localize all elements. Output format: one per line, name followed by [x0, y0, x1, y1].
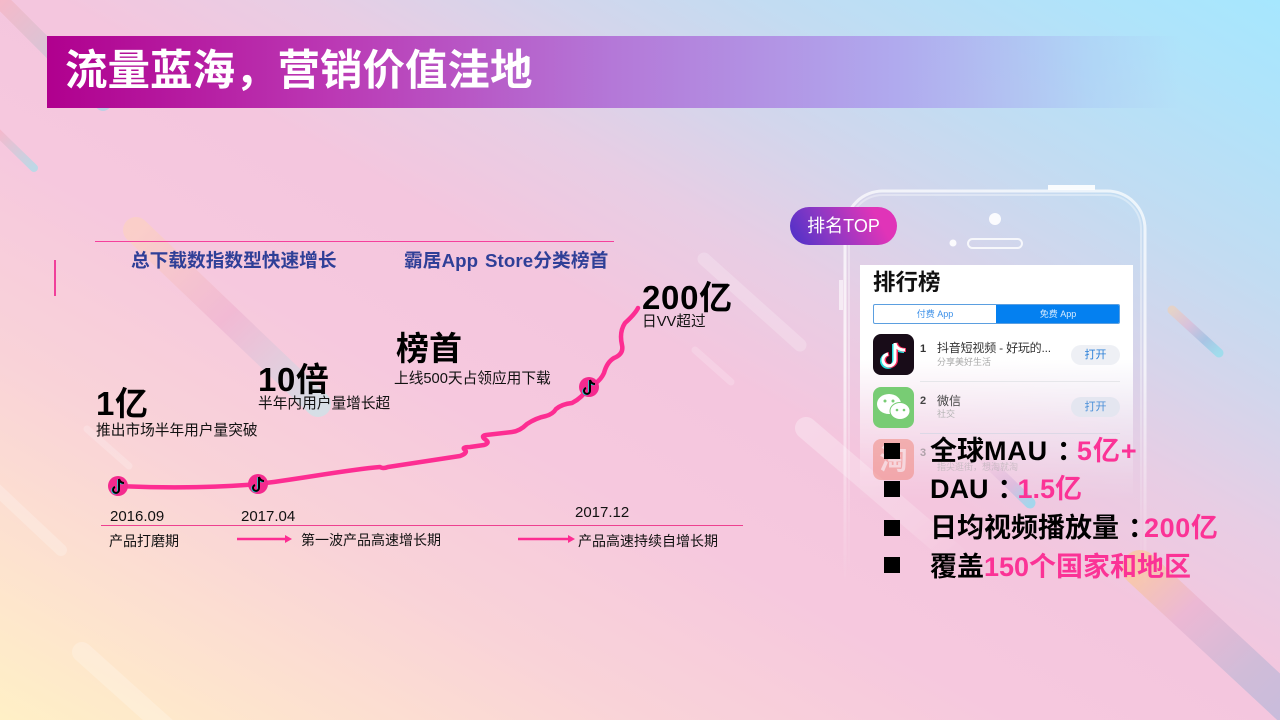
row 2 WeChat: 微信 [937, 394, 961, 408]
title: 流量蓝海，营销价值洼地 [65, 48, 533, 95]
row divider [920, 433, 1120, 434]
row 1 Douyin: 打开 [1084, 349, 1106, 361]
icon: wechat [873, 387, 914, 428]
key metrics list [884, 429, 1218, 582]
row 2 WeChat: 社交 [937, 409, 955, 419]
row 2 WeChat: 2 [920, 395, 926, 407]
screen heading: 排行榜 [873, 270, 941, 295]
segmented tabs: 免费 App [1040, 309, 1076, 319]
milestone 榜首: 上线500天占领应用下载 [394, 371, 551, 387]
row 1 Douyin: 1 [920, 343, 926, 355]
metric: coverage: 覆盖150个国家和地区 [930, 552, 1191, 582]
row 2 WeChat: 打开 [1084, 401, 1106, 413]
phone mockup [839, 185, 1146, 530]
milestone 1亿: 1亿 [96, 385, 149, 422]
side accent [54, 260, 56, 296]
milestone 1亿: 推出市场半年用户量突破 [96, 423, 258, 439]
milestone 200亿: 日VV超过 [642, 314, 706, 330]
title banner [47, 36, 1180, 108]
phase labels: 产品打磨期 [109, 533, 179, 549]
segmented tabs: 付费 App [917, 309, 953, 319]
row 3 Taobao: 指尖逛街，想淘就淘 [937, 462, 1018, 472]
icon: douyin [873, 334, 914, 375]
milestone 榜首 [394, 330, 551, 387]
phase labels: 第一波产品高速增长期 [301, 532, 441, 548]
date labels: 2017.04 [241, 508, 295, 525]
milestone 10倍 [258, 361, 390, 412]
icon: taobao: 淘 [879, 444, 908, 475]
chart: growth timeline [54, 241, 743, 549]
date labels: 2016.09 [110, 508, 164, 525]
milestone 榜首: 榜首 [396, 330, 462, 367]
axis rule [101, 525, 743, 526]
subheading: downloads: 总下载数指数型快速增长 [131, 250, 337, 271]
row 3 Taobao: 3 [920, 447, 926, 459]
row divider [920, 381, 1120, 382]
phase labels: 产品高速持续自增长期 [578, 533, 718, 549]
milestone 200亿: 200亿 [642, 279, 733, 316]
icon: taobao [873, 439, 914, 480]
app ranking screen [860, 265, 1133, 500]
phase labels [109, 532, 718, 549]
badge: ranking top: 排名TOP [807, 216, 880, 236]
segmented tabs [873, 304, 1120, 324]
date labels [110, 504, 629, 525]
growth curve with markers [108, 306, 640, 543]
badge: ranking top [790, 207, 897, 245]
row 1 Douyin: 分享美好生活 [937, 357, 991, 367]
top rule [95, 241, 614, 242]
subheading: app store: 霸居App Store分类榜首 [404, 250, 608, 271]
phone outline [839, 185, 1146, 530]
milestone 10倍: 10倍 [258, 361, 330, 398]
metric: daily views: 日均视频播放量 ：200亿 [930, 506, 1218, 545]
metric: DAU: DAU ：1.5亿 [930, 467, 1082, 506]
milestone 10倍: 半年内用户量增长超 [258, 396, 390, 412]
row 1 Douyin: 抖音短视频 - 好玩的... [937, 341, 1051, 355]
date labels: 2017.12 [575, 504, 629, 521]
metric: MAU: 全球MAU ：5亿+ [930, 429, 1138, 468]
milestone 1亿 [96, 385, 258, 439]
row 2 WeChat [873, 387, 1120, 428]
row 1 Douyin [873, 334, 1120, 375]
row 3 Taobao [873, 439, 1018, 480]
